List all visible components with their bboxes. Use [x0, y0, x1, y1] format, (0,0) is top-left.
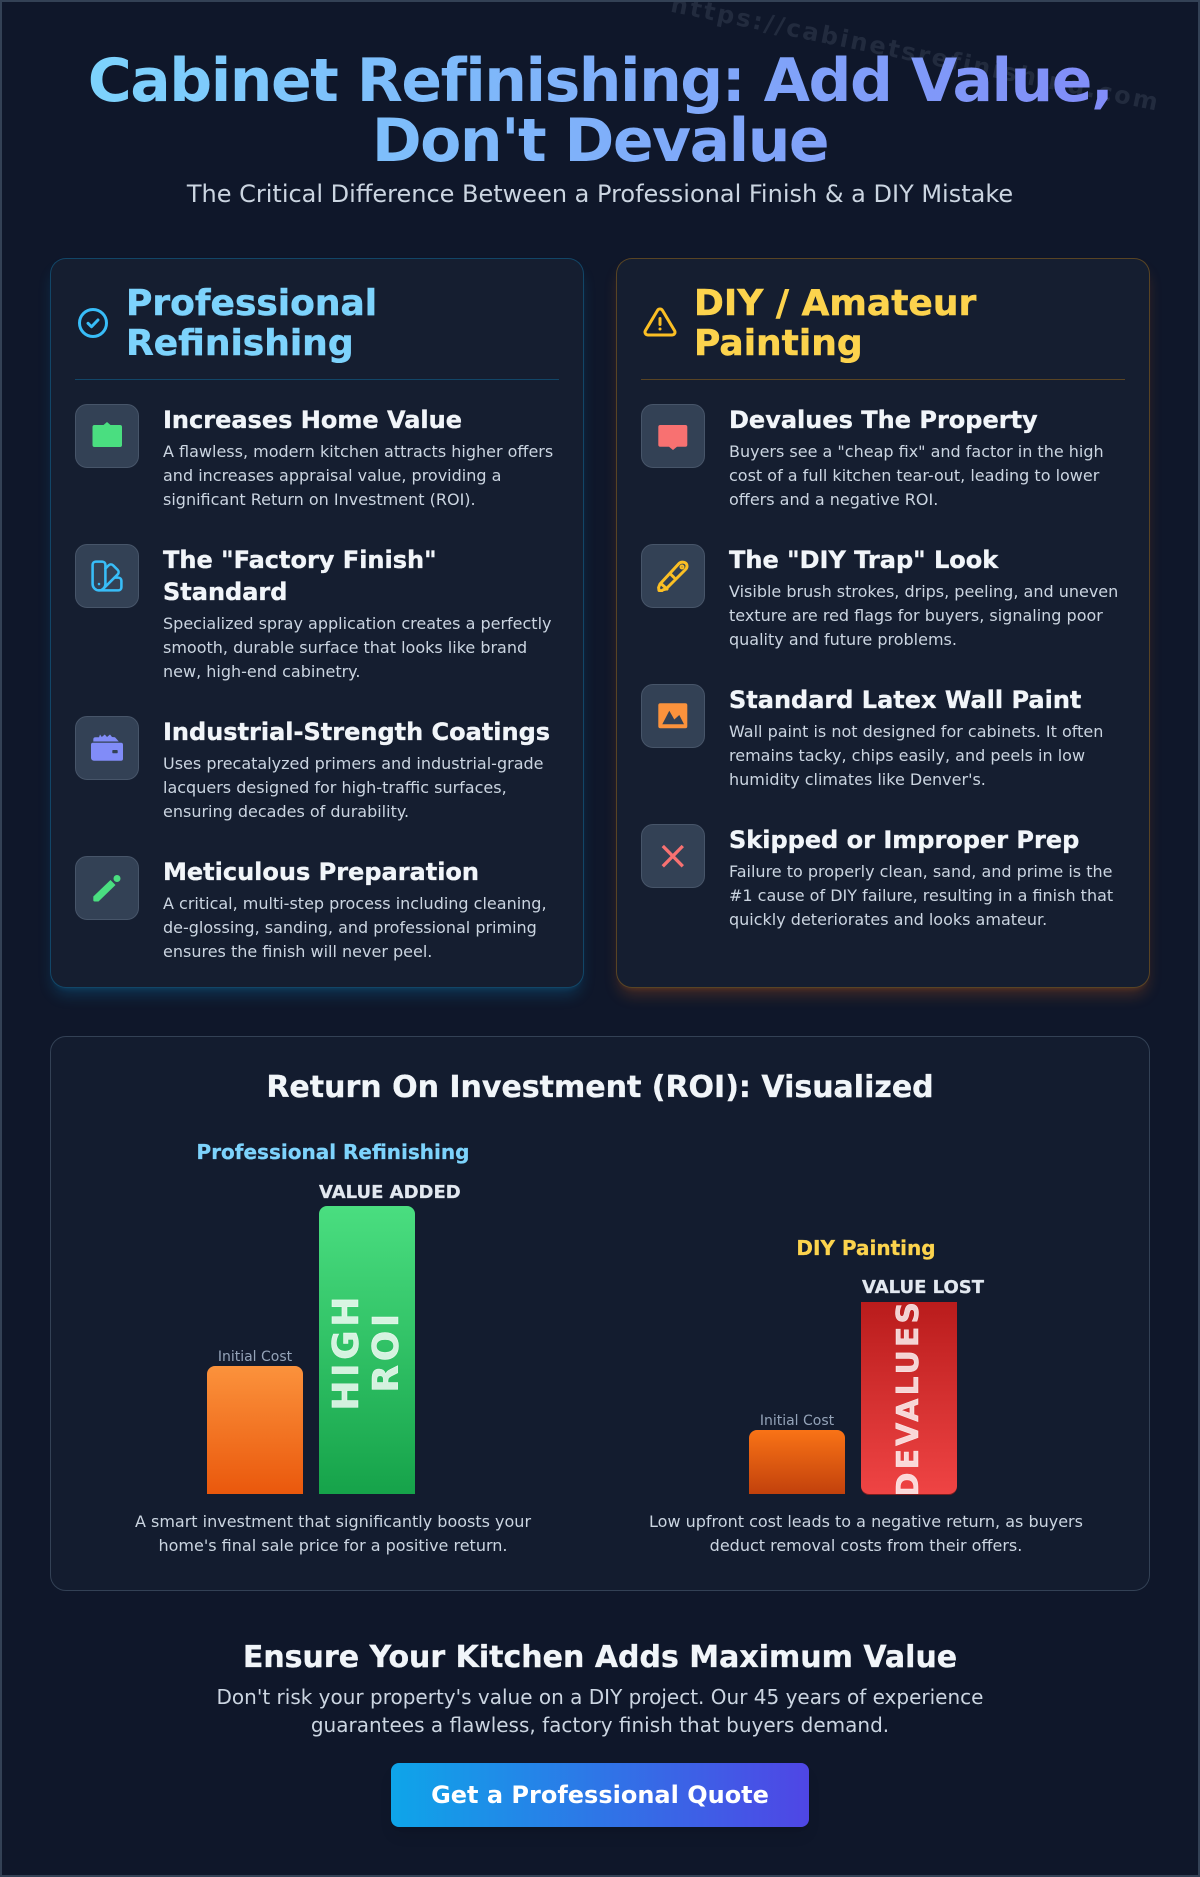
item: industrial coatings: Industrial-Strength Coatings	[163, 718, 550, 746]
label: value lost: VALUE LOST	[862, 1277, 984, 1298]
bar: high roi	[319, 1206, 415, 1494]
label: initial cost: Initial Cost	[218, 1349, 292, 1365]
panel heading: diy: DIY / Amateur Painting	[694, 283, 976, 364]
item: increases home value	[75, 404, 553, 509]
chart caption: diy: deduct removal costs from their offers.	[710, 1536, 1022, 1555]
item: increases home value: Increases Home Value	[163, 406, 462, 434]
roi heading: Return On Investment (ROI): Visualized	[266, 1070, 934, 1105]
comparison panels	[48, 258, 1154, 1002]
item: meticulous preparation: Meticulous Preparation	[163, 858, 479, 886]
chart label: diy: DIY Painting	[796, 1236, 936, 1260]
chart: professional refinishing	[135, 1140, 532, 1555]
chart caption: diy: Low upfront cost leads to a negative return, as buyers	[649, 1512, 1083, 1531]
label: value added: VALUE ADDED	[319, 1182, 461, 1203]
icon: warning triangle	[644, 308, 676, 336]
cta text: Don't risk your property's value on a DIY project. Our 45 years of experience	[217, 1685, 983, 1709]
cta text	[217, 1685, 983, 1737]
subtitle: The Critical Difference Between a Professional Finish & a DIY Mistake	[187, 180, 1013, 208]
item: latex wall paint: Standard Latex Wall Paint	[729, 686, 1081, 714]
item: skipped prep: Failure to properly clean, sand, and prime is the #1 cause of DIY failure, resulting in a finish that quickly deteriorates and looks amateur.	[729, 862, 1113, 929]
item: factory finish: Specialized spray application creates a perfectly smooth, durable surface that looks like brand new, high-end cabinetry.	[163, 614, 552, 681]
chart: diy painting	[649, 1236, 1083, 1555]
item: skipped prep	[641, 824, 1113, 929]
panel: professional refinishing	[50, 258, 584, 988]
item: factory finish: The "Factory Finish" Standard	[163, 546, 437, 606]
icon: outlined pen	[641, 544, 705, 608]
item: meticulous preparation	[75, 856, 547, 961]
call to action	[217, 1640, 983, 1827]
item: diy trap look: The "DIY Trap" Look	[729, 546, 998, 574]
item: industrial coatings: Uses precatalyzed primers and industrial-grade lacquers designed for high-traffic surfaces, ensuring decades of durability.	[163, 754, 544, 821]
chart label: professional: Professional Refinishing	[197, 1140, 469, 1164]
bar: high roi: HIGH	[326, 1293, 367, 1411]
bar: high roi: ROI	[366, 1311, 407, 1393]
title: Cabinet Refinishing: Add Value,	[88, 46, 1112, 116]
title	[88, 51, 1112, 171]
item: diy trap look	[641, 544, 1118, 649]
label: initial cost: Initial Cost	[760, 1413, 834, 1429]
item: meticulous preparation: A critical, multi-step process including cleaning, de-glossing, sanding, and professional priming ensures the finish will never peel.	[163, 894, 547, 961]
icon: green tag	[75, 404, 139, 468]
icon: speech bubble	[641, 404, 705, 468]
title: Don't Devalue	[372, 106, 828, 176]
cta button	[391, 1763, 809, 1827]
item: skipped prep: Skipped or Improper Prep	[729, 826, 1079, 854]
item: industrial coatings	[75, 716, 550, 821]
item: latex wall paint	[641, 684, 1103, 789]
cta button: Get a Professional Quote	[431, 1781, 769, 1809]
bar: devalues	[861, 1302, 957, 1494]
item: devalues the property: Devalues The Property	[729, 406, 1038, 434]
item: devalues the property	[641, 404, 1104, 509]
panel heading: diy	[641, 283, 1125, 380]
icon: pencil	[75, 856, 139, 920]
cta heading: Ensure Your Kitchen Adds Maximum Value	[243, 1640, 957, 1675]
bar: initial cost	[207, 1366, 303, 1494]
chart caption: professional: home's final sale price for a positive return.	[158, 1536, 507, 1555]
item: latex wall paint: Wall paint is not designed for cabinets. It often remains tacky, chips easily, and peels in low humidity climates like Denver's.	[729, 722, 1103, 789]
panel heading: professional	[75, 283, 559, 380]
item: diy trap look: Visible brush strokes, drips, peeling, and uneven texture are red flags for buyers, signaling poor quality and future problems.	[729, 582, 1118, 649]
icon: check circle	[78, 308, 108, 338]
panel: diy amateur painting	[616, 258, 1150, 988]
item: devalues the property: Buyers see a "cheap fix" and factor in the high cost of a full kitchen tear-out, leading to lower offers and a negative ROI.	[729, 442, 1104, 509]
bar: initial cost	[749, 1430, 845, 1494]
chart caption: diy	[649, 1512, 1083, 1555]
cta text: guarantees a flawless, factory finish that buyers demand.	[311, 1713, 889, 1737]
item: factory finish	[75, 544, 552, 681]
panel: roi visualized	[50, 1036, 1150, 1591]
chart caption: professional	[135, 1512, 532, 1555]
icon: colour swatch	[75, 544, 139, 608]
icon: red x	[641, 824, 705, 888]
icon: wallet	[75, 716, 139, 780]
icon: mountain image	[641, 684, 705, 748]
header	[88, 46, 1112, 208]
panel heading: professional: Professional Refinishing	[126, 283, 377, 364]
chart caption: professional: A smart investment that significantly boosts your	[135, 1512, 531, 1531]
item: increases home value: A flawless, modern kitchen attracts higher offers and increases appraisal value, providing a significant Return on Investment (ROI).	[163, 442, 553, 509]
